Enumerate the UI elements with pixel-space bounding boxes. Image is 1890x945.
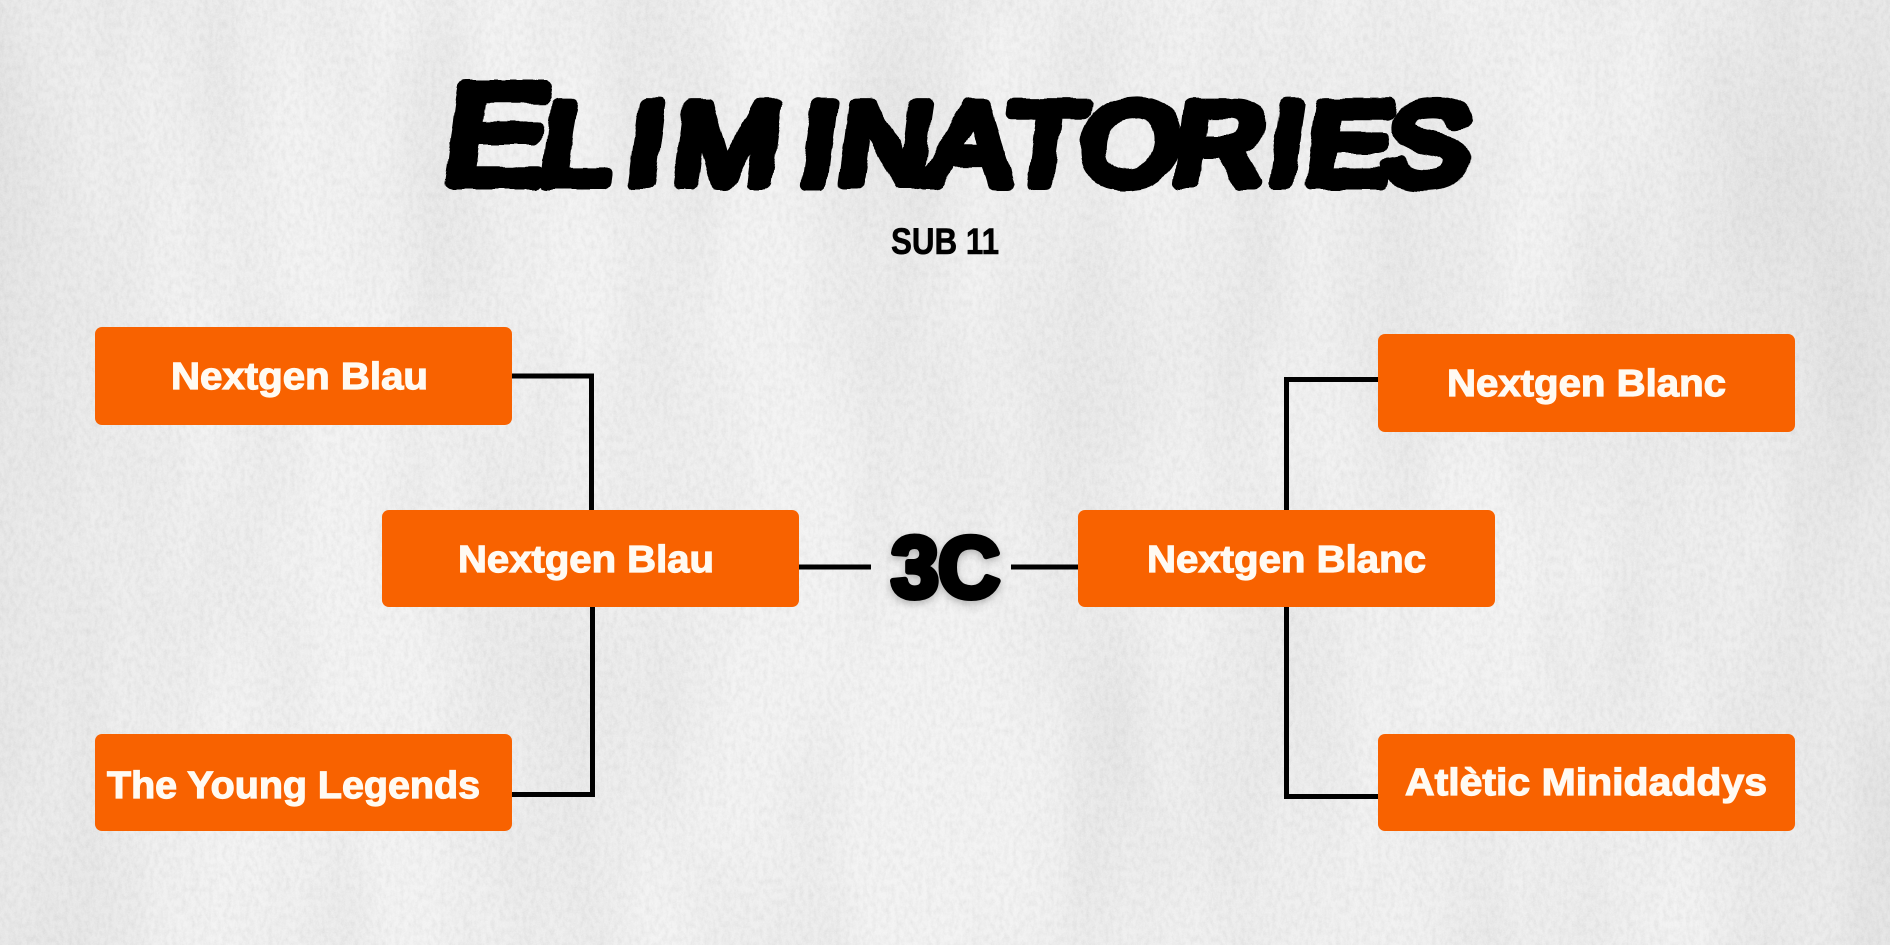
team box: Nextgen Blau, quarter-final left top: Nextgen Blau xyxy=(171,356,428,398)
team box: Nextgen Blanc, finalist: Nextgen Blanc xyxy=(1147,539,1426,581)
team box: Nextgen Blanc, finalist xyxy=(1078,510,1495,607)
team box: Nextgen Blau, quarter-final left top xyxy=(95,327,512,425)
logo: 3C xyxy=(891,520,1000,616)
logo: 3C: C xyxy=(938,520,1000,616)
team box: Atlètic Minidaddys xyxy=(1378,734,1795,831)
title: LIMINATORIES xyxy=(534,81,1479,208)
team box: Nextgen Blau, finalist: Nextgen Blau xyxy=(458,539,714,581)
subtitle: SUB 11 xyxy=(891,221,999,262)
team box: Nextgen Blau, finalist xyxy=(382,510,799,607)
logo: 3C: 3 xyxy=(891,520,939,616)
bracket connectors: left side xyxy=(512,376,871,794)
team box: The Young Legends xyxy=(95,734,512,831)
bracket connectors: right side xyxy=(1011,380,1378,796)
title: E xyxy=(435,55,560,213)
team box: Atlètic Minidaddys: Atlètic Minidaddys xyxy=(1405,762,1767,804)
team box: Nextgen Blanc, quarter-final right top: Nextgen Blanc xyxy=(1447,363,1726,405)
team box: The Young Legends: The Young Legends xyxy=(107,765,480,807)
team box: Nextgen Blanc, quarter-final right top xyxy=(1378,334,1795,432)
